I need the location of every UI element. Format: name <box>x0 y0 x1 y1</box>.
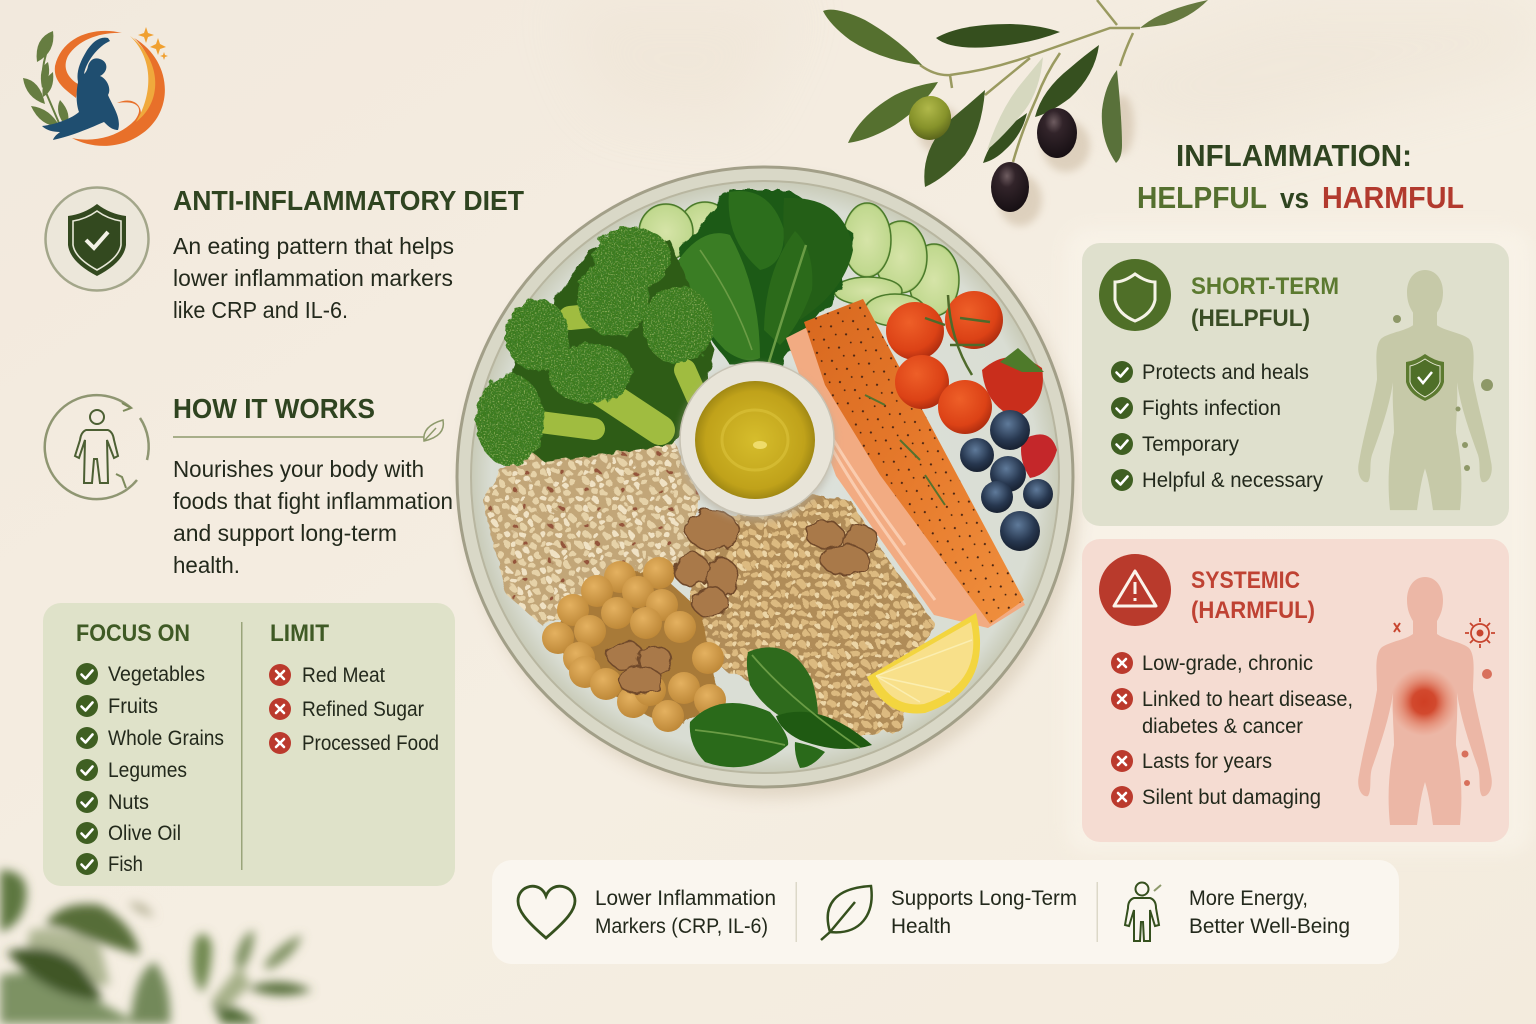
focus on list: Legumes <box>108 759 187 782</box>
salmon fillet <box>786 299 1025 628</box>
benefit: more energy: Better Well-Being <box>1189 915 1350 938</box>
logo <box>23 27 168 146</box>
body silhouette with inflammation <box>1358 577 1495 825</box>
title: inflammation helpful vs harmful: HELPFUL <box>1137 180 1267 215</box>
description <box>173 456 453 578</box>
section: anti-inflammatory diet <box>46 185 524 323</box>
description: lower inflammation markers <box>173 265 453 291</box>
title: inflammation helpful vs harmful: vs <box>1280 183 1309 215</box>
list <box>1111 652 1353 809</box>
broccoli crowns <box>476 227 713 466</box>
description: An eating pattern that helps <box>173 233 454 259</box>
panel: focus on / limit <box>43 603 455 886</box>
logo laurel leaves <box>23 31 68 130</box>
broccoli <box>476 227 715 466</box>
list: Linked to heart disease, <box>1142 688 1353 711</box>
tomatoes <box>886 291 1003 434</box>
cucumber slices <box>639 202 959 326</box>
title: inflammation helpful vs harmful: HARMFUL <box>1322 180 1464 215</box>
description <box>173 233 454 323</box>
logo swirl <box>55 31 122 98</box>
benefit: lower inflammation markers: Markers (CRP, IL-6) <box>595 915 768 938</box>
focus on list: Fruits <box>108 695 158 718</box>
heading: (HARMFUL) <box>1191 597 1315 624</box>
broccoli stems <box>540 314 697 430</box>
heading: HOW IT WORKS <box>173 393 375 424</box>
benefit: long-term health <box>821 886 1077 940</box>
plate <box>457 167 1080 798</box>
olive branch <box>823 0 1208 226</box>
limit list: Red Meat <box>302 664 385 687</box>
logo figure <box>42 38 119 140</box>
focus on heading: FOCUS ON <box>76 620 190 647</box>
focus on list: Fish <box>108 853 143 876</box>
spinach garnish <box>690 647 872 768</box>
list: Protects and heals <box>1142 361 1309 384</box>
title: inflammation helpful vs harmful: INFLAMMATION: <box>1176 138 1412 173</box>
quinoa left <box>482 437 700 626</box>
lemon wedge <box>867 613 980 714</box>
plate of food <box>457 167 1080 798</box>
icon: shield in circle <box>46 188 148 290</box>
focus on list: Vegetables <box>108 663 205 686</box>
strawberries <box>982 348 1057 478</box>
icon: person in circle <box>45 395 149 499</box>
list: Silent but damaging <box>1142 786 1321 809</box>
olive oil bowl <box>679 362 835 521</box>
focus on list: Nuts <box>108 791 149 814</box>
heading <box>1191 567 1315 624</box>
list <box>1111 361 1323 492</box>
branch shadows <box>918 95 1134 226</box>
list: Lasts for years <box>1142 750 1272 773</box>
description: Nourishes your body with <box>173 456 424 482</box>
stems <box>920 0 1140 162</box>
panel: short-term helpful <box>1082 243 1509 526</box>
list: Helpful & necessary <box>1142 469 1323 492</box>
title: inflammation helpful vs harmful <box>1137 138 1464 215</box>
heading: (HELPFUL) <box>1191 305 1310 332</box>
description: like CRP and IL-6. <box>173 297 348 323</box>
heading rule with leaf <box>173 420 443 441</box>
blueberries <box>960 410 1053 551</box>
benefit: long-term health: Health <box>891 915 951 938</box>
list: Low-grade, chronic <box>1142 652 1313 675</box>
broccoli backing <box>490 240 715 462</box>
description: foods that fight inflammation <box>173 488 453 514</box>
list: diabetes & cancer <box>1142 715 1303 738</box>
section: how it works <box>45 393 453 578</box>
body silhouette with shield <box>1358 270 1493 510</box>
blurred foliage bottom-left <box>0 870 312 1024</box>
spinach leaves <box>673 190 855 365</box>
quinoa right <box>690 495 934 738</box>
logo stars <box>138 27 168 60</box>
benefit: more energy <box>1125 882 1350 941</box>
walnuts <box>607 510 878 694</box>
benefit: more energy: More Energy, <box>1189 887 1308 910</box>
list: Fights infection <box>1142 397 1281 420</box>
olives <box>904 91 956 145</box>
limit list: Refined Sugar <box>302 698 424 721</box>
focus on list <box>76 663 224 876</box>
heading <box>1191 273 1339 332</box>
icon: warning <box>1099 554 1171 626</box>
description: and support long-term <box>173 520 397 546</box>
panel: benefits strip <box>492 860 1399 964</box>
panel: systemic harmful <box>1082 539 1509 842</box>
focus on list: Olive Oil <box>108 822 181 845</box>
benefit: lower inflammation markers <box>518 886 776 938</box>
limit list: Processed Food <box>302 732 439 755</box>
heading: SHORT-TERM <box>1191 273 1339 300</box>
limit heading: LIMIT <box>270 620 329 647</box>
benefit: lower inflammation markers: Lower Inflammation <box>595 887 776 910</box>
focus on list: Whole Grains <box>108 727 224 750</box>
icon: shield <box>1099 259 1171 331</box>
limit list <box>269 664 439 755</box>
heading: ANTI-INFLAMMATORY DIET <box>173 185 524 216</box>
list: Temporary <box>1142 433 1239 456</box>
olive leaves <box>823 0 1208 187</box>
benefit: long-term health: Supports Long-Term <box>891 887 1077 910</box>
chickpeas <box>542 557 726 732</box>
description: health. <box>173 552 240 578</box>
heading: SYSTEMIC <box>1191 567 1300 594</box>
